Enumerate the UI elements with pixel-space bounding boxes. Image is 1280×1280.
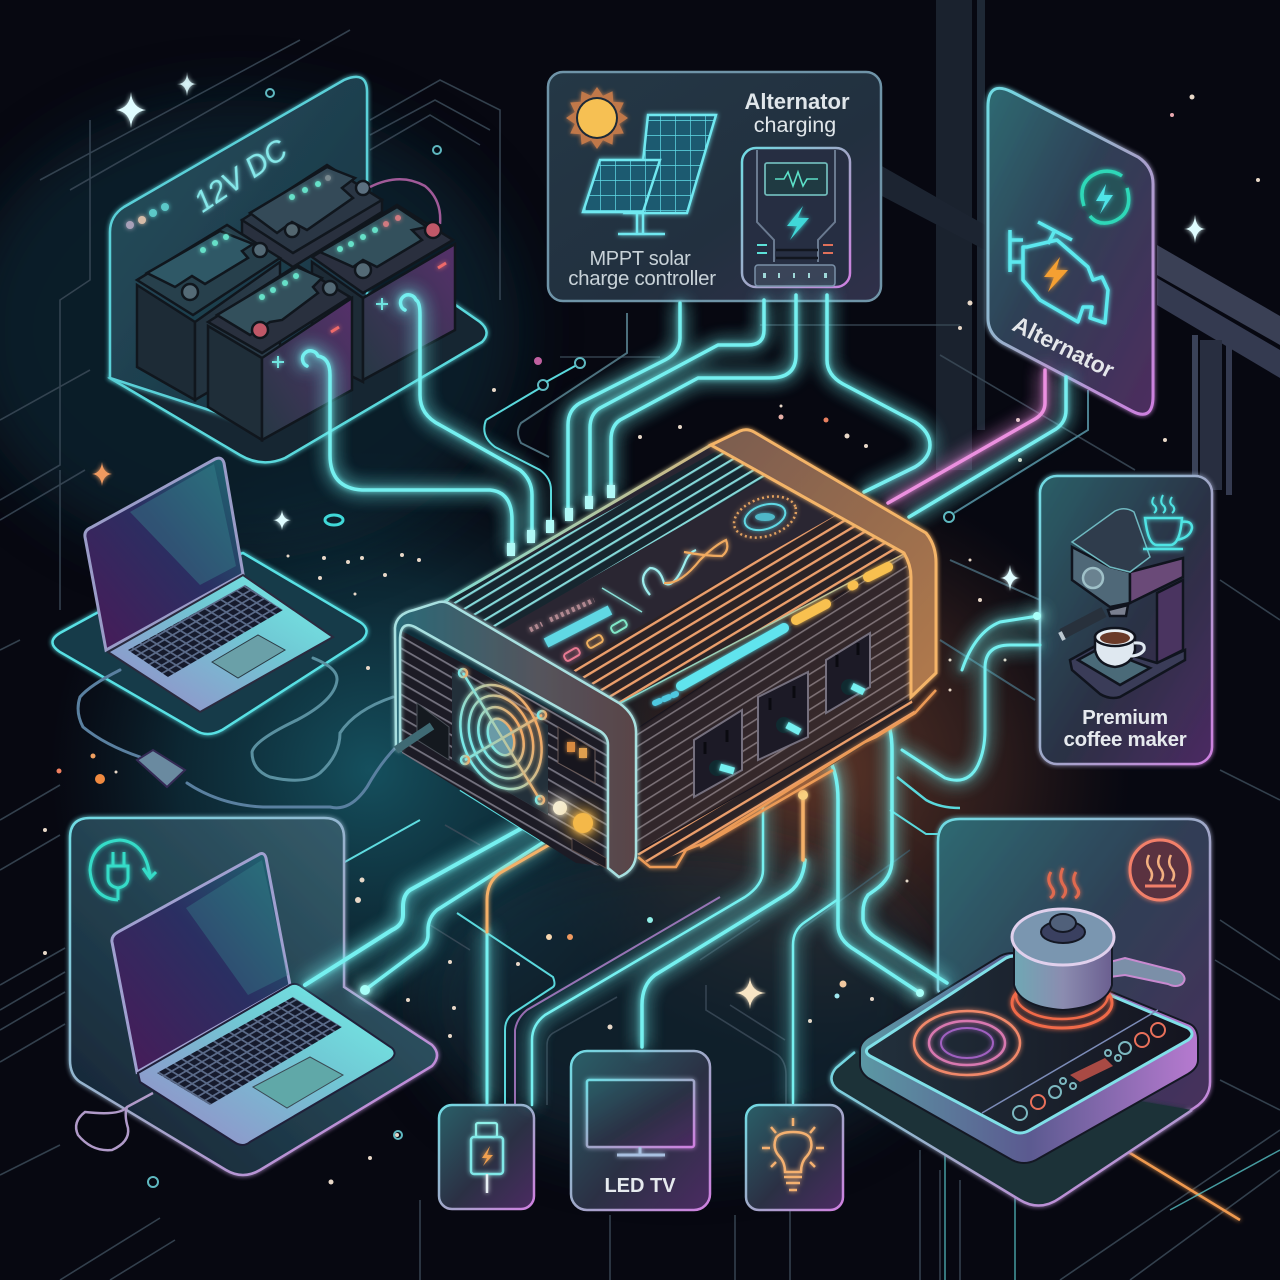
laptop cable xyxy=(76,1093,153,1150)
laptop base xyxy=(108,575,333,712)
top ribs: warm band xyxy=(569,515,904,703)
battery: front xyxy=(208,265,352,440)
label: Premium coffee maker: coffee maker xyxy=(1064,728,1187,751)
icon: steaming cup xyxy=(1143,495,1192,549)
battery: left xyxy=(137,225,280,400)
fan grille xyxy=(446,669,556,804)
sine wave display xyxy=(643,540,727,595)
panel: coffee maker xyxy=(1040,476,1212,764)
panel: USB xyxy=(439,1105,534,1209)
inverter front cap xyxy=(395,602,636,877)
inverter lights xyxy=(655,567,888,703)
battery: right xyxy=(312,205,455,382)
pot xyxy=(1012,909,1185,1010)
inverter far end cap xyxy=(711,430,936,697)
icon: heat symbol xyxy=(1130,840,1190,900)
icon: espresso machine xyxy=(1060,509,1185,698)
AC inlet xyxy=(417,703,449,760)
wires: output cables xyxy=(305,690,947,1105)
icon: charge controller xyxy=(742,148,850,287)
icon: recycle bolt xyxy=(1081,171,1129,223)
panel: induction cooker xyxy=(831,819,1210,1206)
battery: rear xyxy=(242,165,382,267)
inverter lower ribbed skirt xyxy=(636,697,915,865)
label: Alternator charging: charging xyxy=(754,113,836,137)
panel: LED TV xyxy=(571,1051,710,1210)
battery status dots xyxy=(126,203,169,229)
cooker display xyxy=(1070,1058,1113,1082)
panel: 12V DC battery bank xyxy=(110,77,487,462)
burner rings xyxy=(914,971,1112,1075)
laptop screen xyxy=(112,854,290,1072)
cooker platform xyxy=(831,1052,1192,1206)
fan panel xyxy=(452,672,548,815)
label: MPPT solar charge controller: charge controller xyxy=(568,267,716,290)
laptop trackpad xyxy=(253,1057,343,1108)
inverter side warm tint xyxy=(636,553,911,853)
inverter footplate xyxy=(638,690,936,867)
icon: solar panels xyxy=(583,115,716,234)
laptop: upper left xyxy=(52,458,407,808)
AC plug xyxy=(396,726,432,750)
laptop platform xyxy=(52,553,367,734)
panel: alternator xyxy=(988,88,1153,414)
label: Alternator charging: Alternator xyxy=(744,89,850,114)
laptop: lower left xyxy=(70,818,437,1175)
wire: pink alternator cable xyxy=(888,370,1045,503)
battery platform xyxy=(110,300,487,462)
icon: USB plug xyxy=(471,1123,503,1193)
inverter front face xyxy=(400,630,611,867)
icon: plug cycle xyxy=(90,840,156,900)
coffee card xyxy=(1040,476,1212,764)
screen highlight xyxy=(130,464,236,585)
laptop screen xyxy=(85,458,243,650)
laptop cables and adapter xyxy=(78,658,407,808)
outlet: 1 xyxy=(694,710,742,797)
cooker top xyxy=(866,956,1192,1133)
top ribs: left band xyxy=(449,448,767,630)
laptop keyboard xyxy=(128,585,283,677)
label: Alternator: Alternator xyxy=(1009,311,1119,383)
alternator card xyxy=(988,88,1153,414)
laptop keyboard xyxy=(157,997,342,1105)
inverter side face xyxy=(636,553,911,853)
label: MPPT solar charge controller: MPPT solar xyxy=(589,248,691,270)
laptop trackpad xyxy=(212,635,285,678)
wire terminals xyxy=(507,485,615,556)
cooker card xyxy=(938,819,1210,1180)
laptop card and platform xyxy=(70,818,437,1175)
cable end dots xyxy=(360,612,1041,997)
icon: bulb xyxy=(762,1118,824,1190)
battery jumper wire xyxy=(370,179,440,224)
wires: battery and charge cables xyxy=(303,295,1066,550)
cooker controls xyxy=(1013,1023,1165,1120)
decorative rings and nodes xyxy=(148,89,1088,1187)
icon: engine xyxy=(1010,222,1108,323)
label: Premium coffee maker: Premium xyxy=(1082,706,1168,729)
orange cable node xyxy=(798,790,808,800)
icon: sun xyxy=(566,87,628,149)
label: LED TV: LED TV xyxy=(604,1175,676,1197)
sparkles xyxy=(92,72,1206,1009)
inverter top face xyxy=(444,445,904,703)
outlet: 2 xyxy=(758,672,808,760)
panel: light bulb xyxy=(746,1105,843,1210)
power dial xyxy=(729,489,801,545)
battery back panel xyxy=(110,77,367,420)
icon: TV xyxy=(587,1080,694,1155)
switch and connectors xyxy=(553,727,606,868)
inverter xyxy=(395,430,936,877)
outlet: 3 xyxy=(826,633,870,713)
wire: orange cables xyxy=(487,793,803,932)
label: 12V DC: 12V DC xyxy=(188,133,294,219)
laptop base xyxy=(138,984,395,1145)
top panel controls xyxy=(530,588,642,662)
wires: coffee feeds xyxy=(902,616,1040,780)
battery indicators xyxy=(200,175,446,368)
solar card xyxy=(548,72,881,301)
screen highlight xyxy=(186,860,288,995)
cooker body xyxy=(860,953,1198,1163)
icon: steam xyxy=(1049,868,1079,898)
panel: solar and alternator charging xyxy=(548,72,881,301)
